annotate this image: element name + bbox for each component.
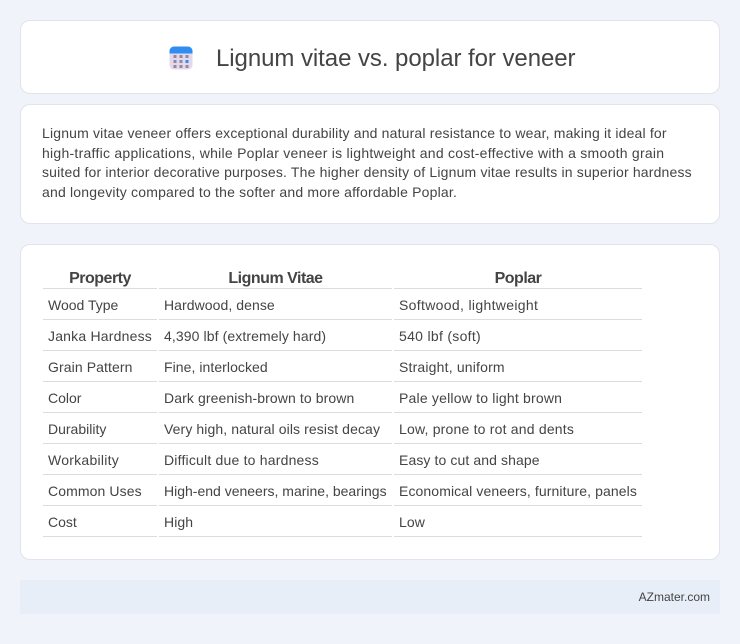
table header: Property: [69, 270, 131, 287]
row: wood type: Hardwood, dense: [164, 297, 275, 313]
panel: title card: [20, 20, 720, 94]
row: color: Dark greenish-brown to brown: [164, 390, 354, 406]
row: grain pattern: Straight, uniform: [399, 359, 505, 375]
panel: summary: [20, 104, 720, 224]
row: grain pattern: Grain Pattern: [48, 359, 133, 375]
row: wood type: [43, 297, 642, 320]
row: janka hardness: [43, 328, 642, 351]
row: grain pattern: Fine, interlocked: [164, 359, 268, 375]
summary text: Lignum vitae veneer offers exceptional durability and natural resistance to wear, making it ideal for: [42, 125, 667, 141]
row: durability: [43, 421, 642, 444]
row: workability: Easy to cut and shape: [399, 452, 540, 468]
row: durability: Durability: [48, 421, 106, 437]
summary text: and longevity compared to the softer and more affordable Poplar.: [42, 184, 457, 200]
table header: [43, 270, 642, 289]
row: common uses: Common Uses: [48, 483, 142, 499]
row: durability: Very high, natural oils resist decay: [164, 421, 380, 437]
table header: Lignum Vitae: [228, 270, 323, 287]
row: janka hardness: Janka Hardness: [48, 328, 152, 344]
title: Lignum vitae vs. poplar for veneer: [216, 45, 575, 72]
row: common uses: [43, 483, 642, 506]
row: wood type: Wood Type: [48, 297, 118, 313]
row: wood type: Softwood, lightweight: [399, 297, 538, 313]
row: durability: Low, prone to rot and dents: [399, 421, 574, 437]
row: cost: Cost: [48, 514, 77, 530]
summary text: high-traffic applications, while Poplar veneer is lightweight and cost-effective with a smooth grain: [42, 145, 664, 161]
table header: Poplar: [495, 270, 541, 287]
panel: comparison table: [20, 244, 720, 560]
footer bar: [20, 580, 720, 614]
row: workability: Workability: [48, 452, 119, 468]
row: color: Pale yellow to light brown: [399, 390, 562, 406]
row: cost: Low: [399, 514, 425, 530]
row: common uses: Economical veneers, furniture, panels: [399, 483, 637, 499]
summary text: suited for interior decorative purposes. The higher density of Lignum vitae results in superior hardness: [42, 164, 692, 180]
row: cost: High: [164, 514, 193, 530]
footer credit: AZmater.com: [639, 590, 710, 604]
icon: calendar: [170, 46, 192, 70]
row: workability: [43, 452, 642, 475]
summary text: [42, 125, 692, 200]
row: workability: Difficult due to hardness: [164, 452, 319, 468]
row: janka hardness: 540 lbf (soft): [399, 328, 481, 344]
row: janka hardness: 4,390 lbf (extremely hard): [164, 328, 326, 344]
row: color: [43, 390, 642, 413]
row: color: Color: [48, 390, 81, 406]
row: grain pattern: [43, 359, 642, 382]
row: cost: [43, 514, 642, 537]
row: common uses: High-end veneers, marine, bearings: [164, 483, 387, 499]
